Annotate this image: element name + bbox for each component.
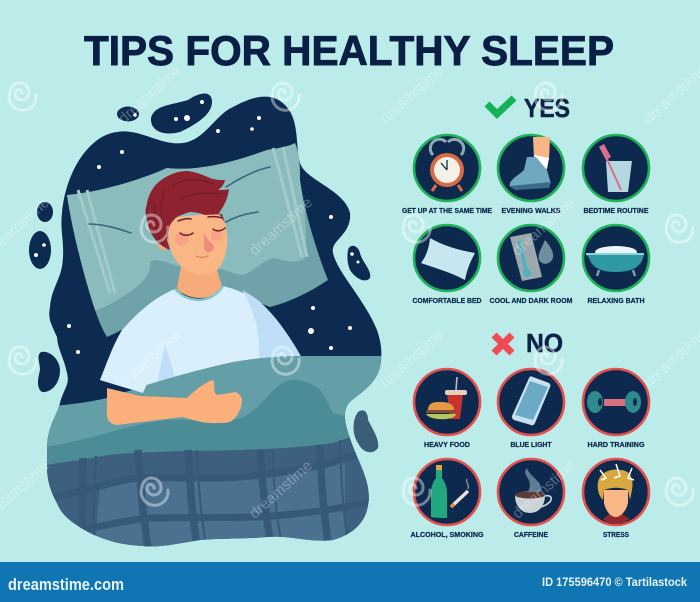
label group no: CAFFEINE xyxy=(514,532,548,539)
ear xyxy=(157,232,169,250)
lower blob xyxy=(354,410,378,452)
no header xyxy=(494,328,563,358)
hair xyxy=(146,171,229,250)
watermark text: dreamstime xyxy=(377,326,447,391)
label group yes: GET UP AT THE SAME TIME xyxy=(402,208,492,215)
icon: pillow xyxy=(414,225,480,291)
footer logo: dreamstime.com xyxy=(8,575,124,594)
cross mark xyxy=(494,335,512,353)
floating blobs xyxy=(29,94,370,392)
title: TIPS FOR HEALTHY SLEEP xyxy=(84,27,614,74)
arm and hand xyxy=(107,380,242,425)
icon: alarm clock xyxy=(414,135,480,201)
pillow xyxy=(67,143,328,337)
blanket light xyxy=(47,356,382,447)
watermark text: dreamstime xyxy=(509,457,579,522)
label group yes: COOL AND DARK ROOM xyxy=(490,298,573,305)
label group yes: EVENING WALKS xyxy=(502,208,561,215)
label group no: HEAVY FOOD xyxy=(424,442,470,449)
yes label: YES xyxy=(524,93,570,123)
watermark text: dreamstime xyxy=(377,62,447,127)
blanket dark xyxy=(40,380,360,480)
label group yes: RELAXING BATH xyxy=(588,298,644,305)
cheeks xyxy=(175,232,189,246)
sleeping person illustration xyxy=(29,94,400,560)
watermark text: dreamstime xyxy=(246,194,316,259)
no label: NO xyxy=(526,328,563,358)
mouth xyxy=(196,256,208,258)
icon: stressed head xyxy=(583,459,649,525)
icon: toothbrush and glass xyxy=(583,135,649,201)
icon: thermometer and bulb xyxy=(498,225,564,291)
watermark text: dreamstime xyxy=(115,62,185,127)
label group no xyxy=(410,442,645,539)
stars xyxy=(34,100,360,354)
face xyxy=(168,213,227,275)
quilt xyxy=(47,437,369,546)
icon: burger and soda xyxy=(414,369,480,435)
watermark text xyxy=(0,62,700,522)
label group no: ALCOHOL, SMOKING xyxy=(410,532,484,539)
icon: bottle and cigarette xyxy=(414,459,480,525)
label group yes xyxy=(402,208,649,305)
head xyxy=(146,171,229,275)
icon: walking shoe xyxy=(498,135,564,201)
label group yes: BEDTIME ROUTINE xyxy=(584,208,649,215)
label group no: HARD TRAINING xyxy=(588,442,645,449)
icon: dumbbell xyxy=(583,369,649,435)
icon: smartphone xyxy=(498,369,564,435)
label group yes: COMFORTABLE BED xyxy=(412,298,482,305)
yes header xyxy=(487,93,570,123)
nose xyxy=(203,232,214,252)
check mark xyxy=(487,98,514,114)
label group no: BLUE LIGHT xyxy=(510,442,552,449)
eyes and brows xyxy=(178,217,225,235)
icon: bathtub xyxy=(583,225,649,291)
icon: coffee cup xyxy=(498,459,564,525)
watermark spirals xyxy=(9,83,693,505)
label group no: STRESS xyxy=(603,532,629,539)
sleeve xyxy=(100,330,165,393)
shirt xyxy=(100,286,303,400)
watermark text: dreamstime xyxy=(509,194,579,259)
footer bar xyxy=(0,562,700,602)
neck xyxy=(177,262,222,298)
watermark text: dreamstime xyxy=(115,326,185,391)
watermark text: dreamstime xyxy=(246,457,316,522)
footer credit: ID 175596470 © Tartilastock xyxy=(542,577,688,589)
night sky blob xyxy=(47,97,381,546)
